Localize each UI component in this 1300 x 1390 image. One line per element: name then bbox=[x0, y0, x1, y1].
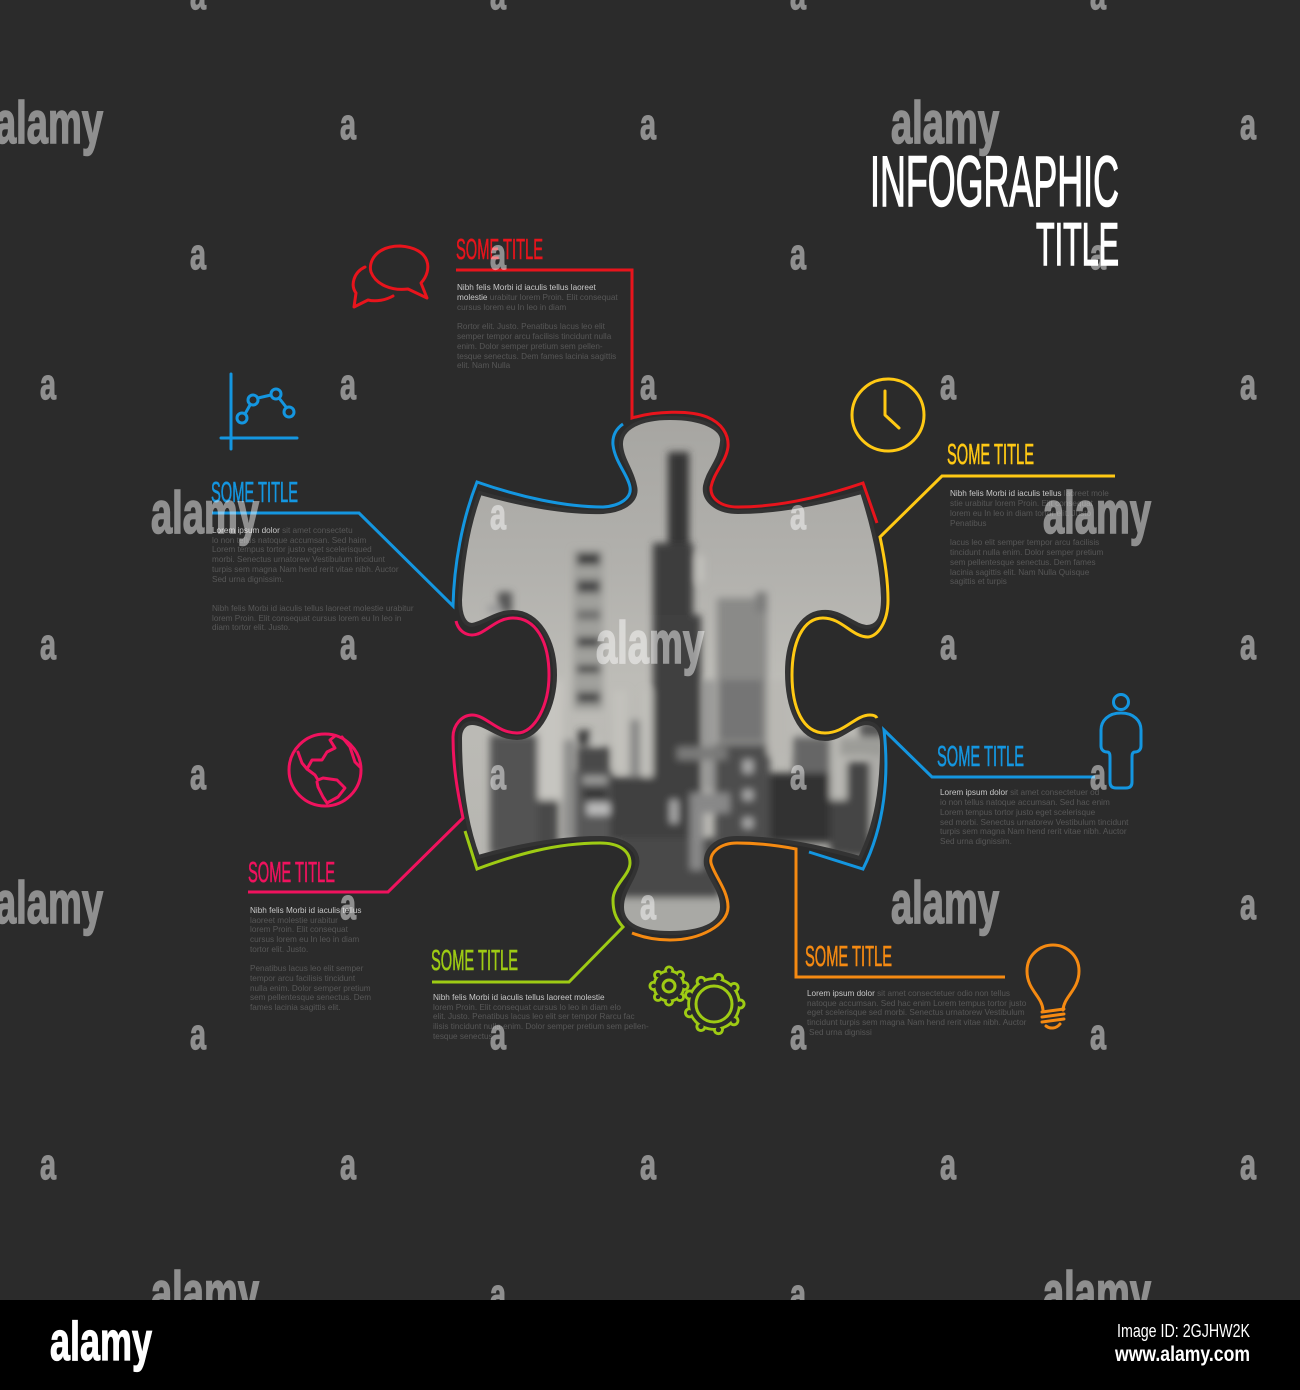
panel: blue left section bbox=[211, 374, 630, 632]
leader line: pink bbox=[248, 618, 549, 892]
watermark grid: alamy bbox=[0, 90, 103, 156]
watermark grid: alamy bbox=[891, 90, 999, 156]
title: yellow: SOME TITLE bbox=[947, 439, 1034, 471]
text block: red: semper tempor arcu facilisis tincidunt nulla bbox=[457, 332, 612, 341]
puzzle piece with blurred city photo bbox=[462, 420, 881, 931]
watermark grid: a bbox=[1240, 880, 1256, 929]
leader line: orange bbox=[632, 843, 1005, 977]
text block: blue left: turpis sem magna Nam hend rerit vitae nibh. Auctor bbox=[212, 565, 399, 574]
watermark grid: a bbox=[640, 880, 656, 929]
text block: blue left: morbi. Senectus urnatorew Vestibulum tincidunt bbox=[212, 555, 386, 564]
text block: yellow bbox=[950, 489, 1109, 586]
watermark grid: a bbox=[940, 360, 956, 409]
watermark grid: a bbox=[490, 1010, 506, 1059]
footer url: www.alamy.com bbox=[1114, 1343, 1250, 1366]
text block: yellow: lacus leo elit semper tempor arcu facilisis bbox=[950, 538, 1099, 547]
title: blue left: SOME TITLE bbox=[211, 477, 298, 509]
text block: pink: sem pellentesque senectus. Dem bbox=[250, 993, 371, 1002]
watermark grid: alamy bbox=[596, 610, 704, 676]
icon: clock bbox=[852, 379, 924, 451]
text block: orange: Sed urna dignissi bbox=[809, 1028, 872, 1037]
leader line: green bbox=[432, 831, 630, 982]
text block: orange: tincidunt turpis sem magna Nam hend rerit vitae nibh. Auctor bbox=[807, 1018, 1027, 1027]
text block: pink: laoreet molestie urabitur bbox=[250, 916, 338, 925]
title: orange: SOME TITLE bbox=[805, 941, 892, 973]
watermark grid: a bbox=[1090, 1010, 1106, 1059]
text block: yellow: Nibh felis Morbi id iaculis tellus laoreet mole bbox=[950, 489, 1109, 498]
text block: pink: Penatibus lacus leo elit semper bbox=[250, 964, 364, 973]
panel: green bottom section bbox=[431, 831, 741, 1041]
text block: red: molestie urabitur lorem Proin. Elit consequat bbox=[457, 293, 618, 302]
watermark grid: a bbox=[1240, 360, 1256, 409]
watermark grid: a bbox=[190, 1010, 206, 1059]
text block: blue right: Sed urna dignissim. bbox=[940, 837, 1012, 846]
watermark grid: a bbox=[340, 1140, 356, 1189]
watermark grid: a bbox=[340, 880, 356, 929]
text block: red: elit. Nam Nulla bbox=[457, 361, 511, 370]
text block: pink: nulla enim. Dolor semper pretium bbox=[250, 984, 371, 993]
watermark grid: a bbox=[940, 1140, 956, 1189]
text block: blue right: Lorem ipsum dolor sit amet consectetuer od bbox=[940, 788, 1100, 797]
panel: red top section bbox=[353, 234, 877, 523]
text block: green bbox=[433, 993, 649, 1041]
watermark grid: a bbox=[190, 230, 206, 279]
watermark grid: alamy bbox=[151, 480, 259, 546]
icon: gears bbox=[652, 970, 741, 1031]
watermark grid: a bbox=[790, 750, 806, 799]
watermark grid: alamy bbox=[1043, 1260, 1151, 1326]
text block: yellow: Penatibus bbox=[950, 519, 986, 528]
watermark grid: a bbox=[790, 230, 806, 279]
text block: green: lorem Proin. Elit consequat cursus lo leo in diam elo bbox=[433, 1003, 621, 1012]
text block: orange bbox=[807, 989, 1027, 1037]
text block: red bbox=[457, 283, 618, 370]
watermark grid: a bbox=[640, 1140, 656, 1189]
text block: red: enim. Dolor semper pretium sem pellen- bbox=[457, 342, 603, 351]
watermark grid: alamy bbox=[0, 870, 103, 936]
watermark grid: a bbox=[40, 1140, 56, 1189]
watermark grid: a bbox=[340, 100, 356, 149]
text block: yellow: lorem eu In leo in diam tortor elit. Justo bbox=[950, 509, 1092, 518]
watermark grid: a bbox=[640, 100, 656, 149]
watermark grid: a bbox=[340, 360, 356, 409]
watermark grid: a bbox=[790, 1010, 806, 1059]
text block: orange: Lorem ipsum dolor sit amet consectetuer odio non tellus bbox=[807, 989, 1010, 998]
watermark grid: a bbox=[40, 620, 56, 669]
watermark grid: alamy bbox=[891, 870, 999, 936]
text block: orange: natoque accumsan. Sed hac enim Lorem tempus tortor justo bbox=[807, 999, 1027, 1008]
watermark grid: alamy bbox=[151, 1260, 259, 1326]
watermark grid: a bbox=[490, 230, 506, 279]
watermark grid: a bbox=[1090, 230, 1106, 279]
text block: pink bbox=[250, 906, 371, 1012]
text block: blue right: Lorem tempus tortor justo eget scelerisque bbox=[940, 808, 1096, 817]
watermark grid: a bbox=[1090, 750, 1106, 799]
text block: pink: Nibh felis Morbi id iaculis tellus bbox=[250, 906, 361, 915]
watermark grid: a bbox=[790, 1270, 806, 1319]
text block: blue right: turpis sem magna Nam hend rerit vitae nibh. Auctor bbox=[940, 827, 1127, 836]
text block: green: ilisis tincidunt nulla enim. Dolor semper pretium sem pellen- bbox=[433, 1022, 649, 1031]
text block: orange: eget scelerisque sed morbi. Senectus urnatorew Vestibulum bbox=[807, 1008, 1025, 1017]
text block: green: Nibh felis Morbi id iaculis tellus laoreet molestie bbox=[433, 993, 605, 1002]
footer image id: Image ID: 2GJHW2K bbox=[1117, 1321, 1250, 1341]
watermark grid: a bbox=[940, 620, 956, 669]
text block: blue left: Sed urna dignissim. bbox=[212, 575, 284, 584]
watermark grid: a bbox=[1240, 620, 1256, 669]
text block: green: tesque senectus bbox=[433, 1032, 493, 1041]
text block: green: elit. Justo. Penatibus lacus leo elit ser tempor Rarcu fac bbox=[433, 1012, 635, 1021]
icon: light bulb bbox=[1027, 945, 1079, 1028]
icon: speech bubbles bbox=[353, 246, 428, 307]
text block: red: tesque senectus. Dem fames lacinia sagittis bbox=[457, 352, 616, 361]
leader line: yellow bbox=[792, 476, 1115, 733]
text block: yellow: tincidunt nulla enim. Dolor semper pretium bbox=[950, 548, 1104, 557]
watermark grid: a bbox=[490, 1270, 506, 1319]
watermark grid: a bbox=[490, 750, 506, 799]
watermark grid: alamy bbox=[1043, 480, 1151, 546]
watermark grid: a bbox=[490, 490, 506, 539]
icon: line chart bbox=[221, 374, 297, 449]
text block: yellow: stie urabitur lorem Proin. Elit consequat bbox=[950, 499, 1094, 508]
panel: pink left section bbox=[248, 618, 549, 1012]
footer logo: alamy bbox=[50, 1310, 152, 1372]
leader line: blue left bbox=[212, 424, 630, 606]
panel: yellow right section bbox=[792, 379, 1115, 733]
title: red: SOME TITLE bbox=[456, 234, 543, 266]
footer bar bbox=[0, 1300, 1300, 1390]
text block: pink: tempor arcu facilisis tincidunt bbox=[250, 974, 356, 983]
text block: yellow: lacinia sagittis elit. Nam Nulla Quisque bbox=[950, 568, 1090, 577]
text block: blue left: lo non tellus natoque accumsan. Sed haim bbox=[212, 536, 366, 545]
text block: blue left: Nibh felis Morbi id iaculis tellus laoreet molestie urabitur bbox=[212, 604, 414, 613]
icon: globe bbox=[289, 734, 361, 806]
main title: TITLE bbox=[1036, 211, 1119, 278]
text block: red: Rortor elit. Justo. Penatibus lacus leo elit bbox=[457, 322, 606, 331]
main title bbox=[870, 143, 1119, 278]
text block: pink: lorem Proin. Elit consequat bbox=[250, 925, 349, 934]
text block: yellow: sem pellentesque senectus. Dem fames bbox=[950, 558, 1096, 567]
panel: blue right section bbox=[809, 694, 1141, 869]
text block: blue right: io non tellus natoque accumsan. Sed hac enim bbox=[940, 798, 1110, 807]
text block: yellow: sagittis et turpis bbox=[950, 577, 1007, 586]
title: pink: SOME TITLE bbox=[248, 857, 335, 889]
title: blue right: SOME TITLE bbox=[937, 741, 1024, 773]
text block: blue left: diam tortor elit. Justo. bbox=[212, 623, 290, 632]
text block: red: Nibh felis Morbi id iaculis tellus laoreet bbox=[457, 283, 597, 292]
watermark grid: a bbox=[1240, 1140, 1256, 1189]
text block: pink: fames lacinia sagittis elit. bbox=[250, 1003, 341, 1012]
text block: blue left: Lorem tempus tortor justo eget scelerisqued bbox=[212, 545, 372, 554]
text block: blue right: sed morbi. Senectus urnatorew Vestibulum tincidunt bbox=[940, 818, 1129, 827]
text block: pink: cursus lorem eu In leo in diam bbox=[250, 935, 359, 944]
text block: blue left: lorem Proin. Elit consequat cursus lorem eu In leo in bbox=[212, 614, 402, 623]
title: green: SOME TITLE bbox=[431, 945, 518, 977]
watermark grid: a bbox=[1240, 100, 1256, 149]
text block: blue left: Lorem ipsum dolor sit amet consectetu bbox=[212, 526, 353, 535]
watermark grid: a bbox=[640, 360, 656, 409]
watermark grid: a bbox=[40, 360, 56, 409]
leader line: blue right bbox=[809, 730, 1095, 869]
watermark grid: a bbox=[190, 750, 206, 799]
watermark grid: a bbox=[340, 620, 356, 669]
watermark grid: a bbox=[790, 490, 806, 539]
text block: blue left bbox=[212, 526, 414, 632]
panel: orange bottom section bbox=[632, 843, 1079, 1037]
leader line: red bbox=[456, 270, 877, 523]
text block: blue right bbox=[940, 788, 1129, 846]
icon: person bbox=[1101, 694, 1141, 788]
text block: red: cursus lorem eu In leo in diam bbox=[457, 303, 566, 312]
text block: pink: tortor elit. Justo. bbox=[250, 945, 308, 954]
